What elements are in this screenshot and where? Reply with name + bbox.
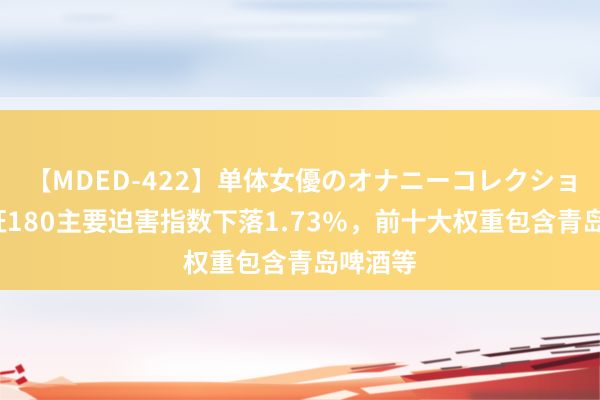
brush stroke: dark flecks on the right <box>350 333 600 371</box>
banner: yellow band <box>0 110 600 290</box>
paint splatter: red on the left <box>0 364 28 385</box>
brush stroke: orange-red base <box>0 352 600 400</box>
headline line 3: 权重包含青岛啤酒等 <box>183 243 417 280</box>
headline line 1: 【MDED-422】单体女優のオナニーコレクショ <box>26 161 581 198</box>
paint splatter: pale lower-left corner <box>0 385 38 400</box>
